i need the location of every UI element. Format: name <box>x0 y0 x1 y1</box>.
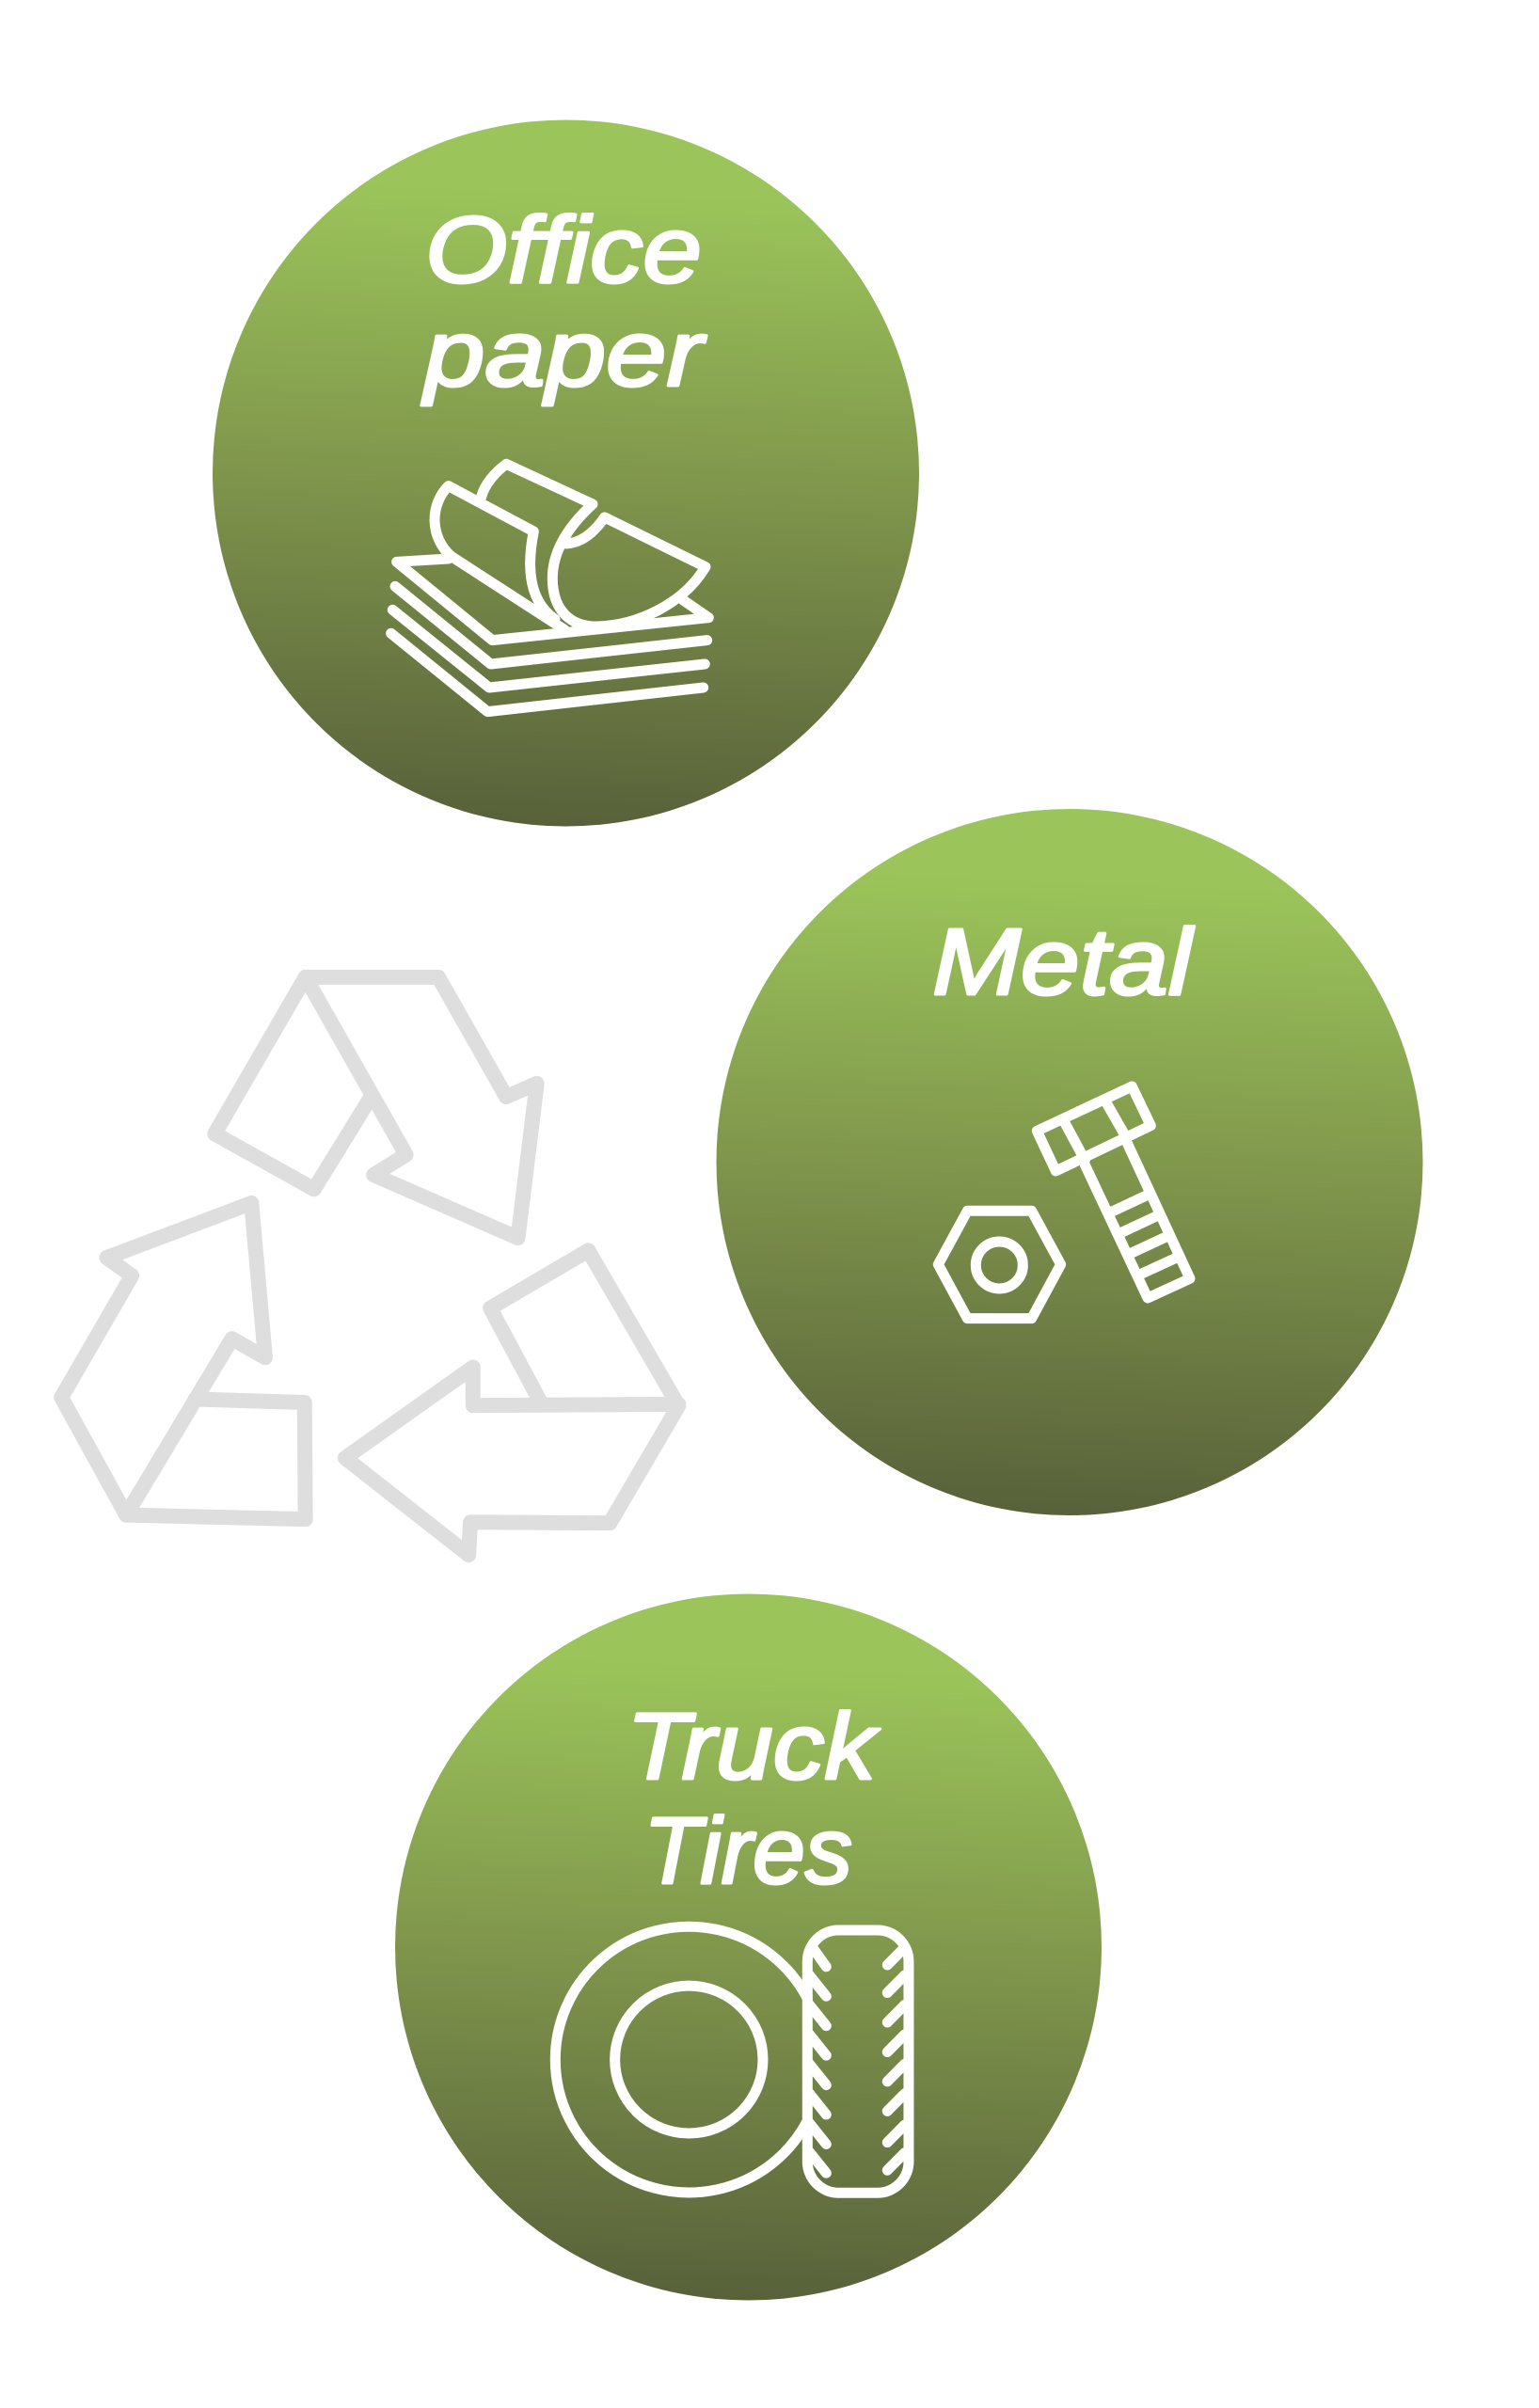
heading: Office paper: Office <box>425 198 702 303</box>
panel: truck tires <box>395 1593 1102 2301</box>
heading: Office paper: paper <box>421 301 706 406</box>
nut <box>938 1211 1061 1319</box>
top arrow <box>214 977 537 1238</box>
panel: office paper <box>213 120 919 826</box>
green circle: metal <box>717 809 1422 1515</box>
icon: bolt and nut <box>938 1086 1190 1319</box>
heading: Truck Tires: Truck <box>627 1694 881 1799</box>
heading: Metal: Metal <box>932 910 1195 1015</box>
icon: truck tire <box>555 1926 909 2193</box>
heading: Truck Tires <box>627 1694 881 1904</box>
icon: recycling arrows <box>61 977 678 1555</box>
panel: metal <box>717 809 1422 1515</box>
left arrow <box>61 1203 306 1519</box>
bolt <box>1037 1086 1190 1298</box>
green circle: truck tires <box>395 1593 1102 2301</box>
heading: Truck Tires: Tires <box>643 1798 852 1904</box>
heading: Office paper <box>421 198 706 406</box>
icon: paper stack <box>391 464 708 712</box>
green circle: office paper <box>213 120 919 826</box>
right arrow <box>345 1250 678 1555</box>
